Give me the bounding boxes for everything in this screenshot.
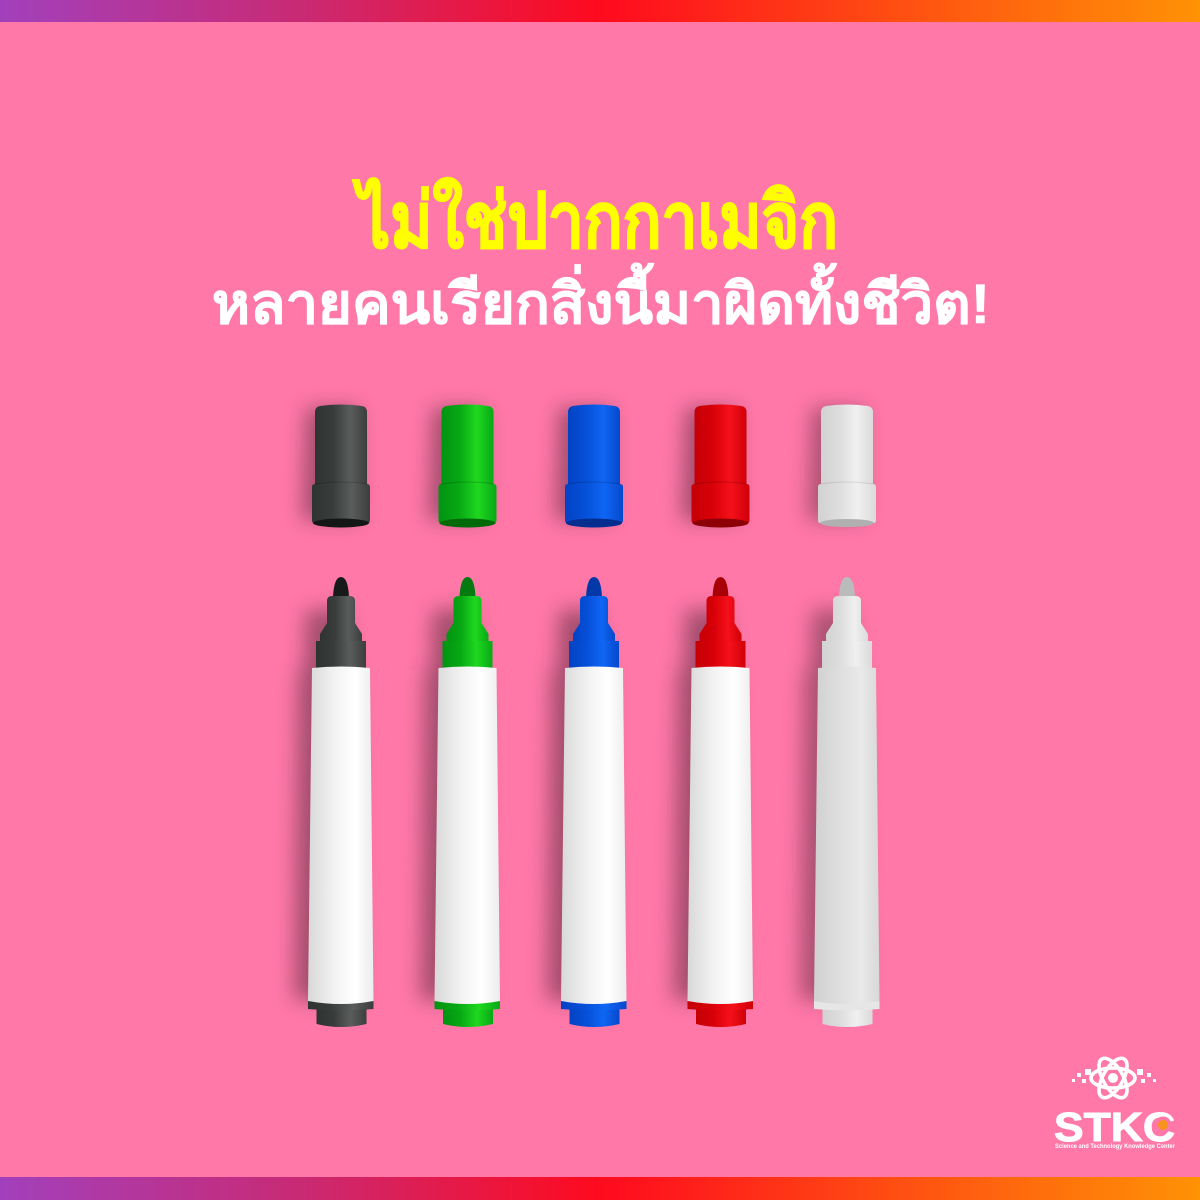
logo orange dot	[1158, 1120, 1168, 1130]
logo: STKC	[1054, 1054, 1176, 1150]
logo tagline: Science and Technology Knowledge Center	[1055, 1144, 1176, 1150]
cap: red	[682, 404, 750, 528]
cap: blue	[555, 404, 623, 528]
cap: black	[302, 404, 370, 528]
marker: red	[674, 577, 753, 1027]
subtitle: หลายคนเรียกสิ่งนี้มาผิดทั้งชีวิต!	[212, 263, 990, 335]
logo wordmark: STKC	[1054, 1104, 1175, 1150]
icon: atom	[1072, 1054, 1156, 1102]
marker: blue	[547, 577, 626, 1027]
logo dot backing	[1154, 1116, 1172, 1134]
bottom gradient bar	[0, 1177, 1200, 1200]
title: ไม่ใช่ปากกาเมจิก	[352, 177, 838, 264]
top gradient bar	[0, 0, 1200, 22]
marker: black	[294, 577, 374, 1027]
marker: white	[800, 577, 880, 1027]
marker: green	[420, 577, 500, 1027]
cap: green	[428, 404, 496, 528]
cap: white	[808, 404, 876, 527]
